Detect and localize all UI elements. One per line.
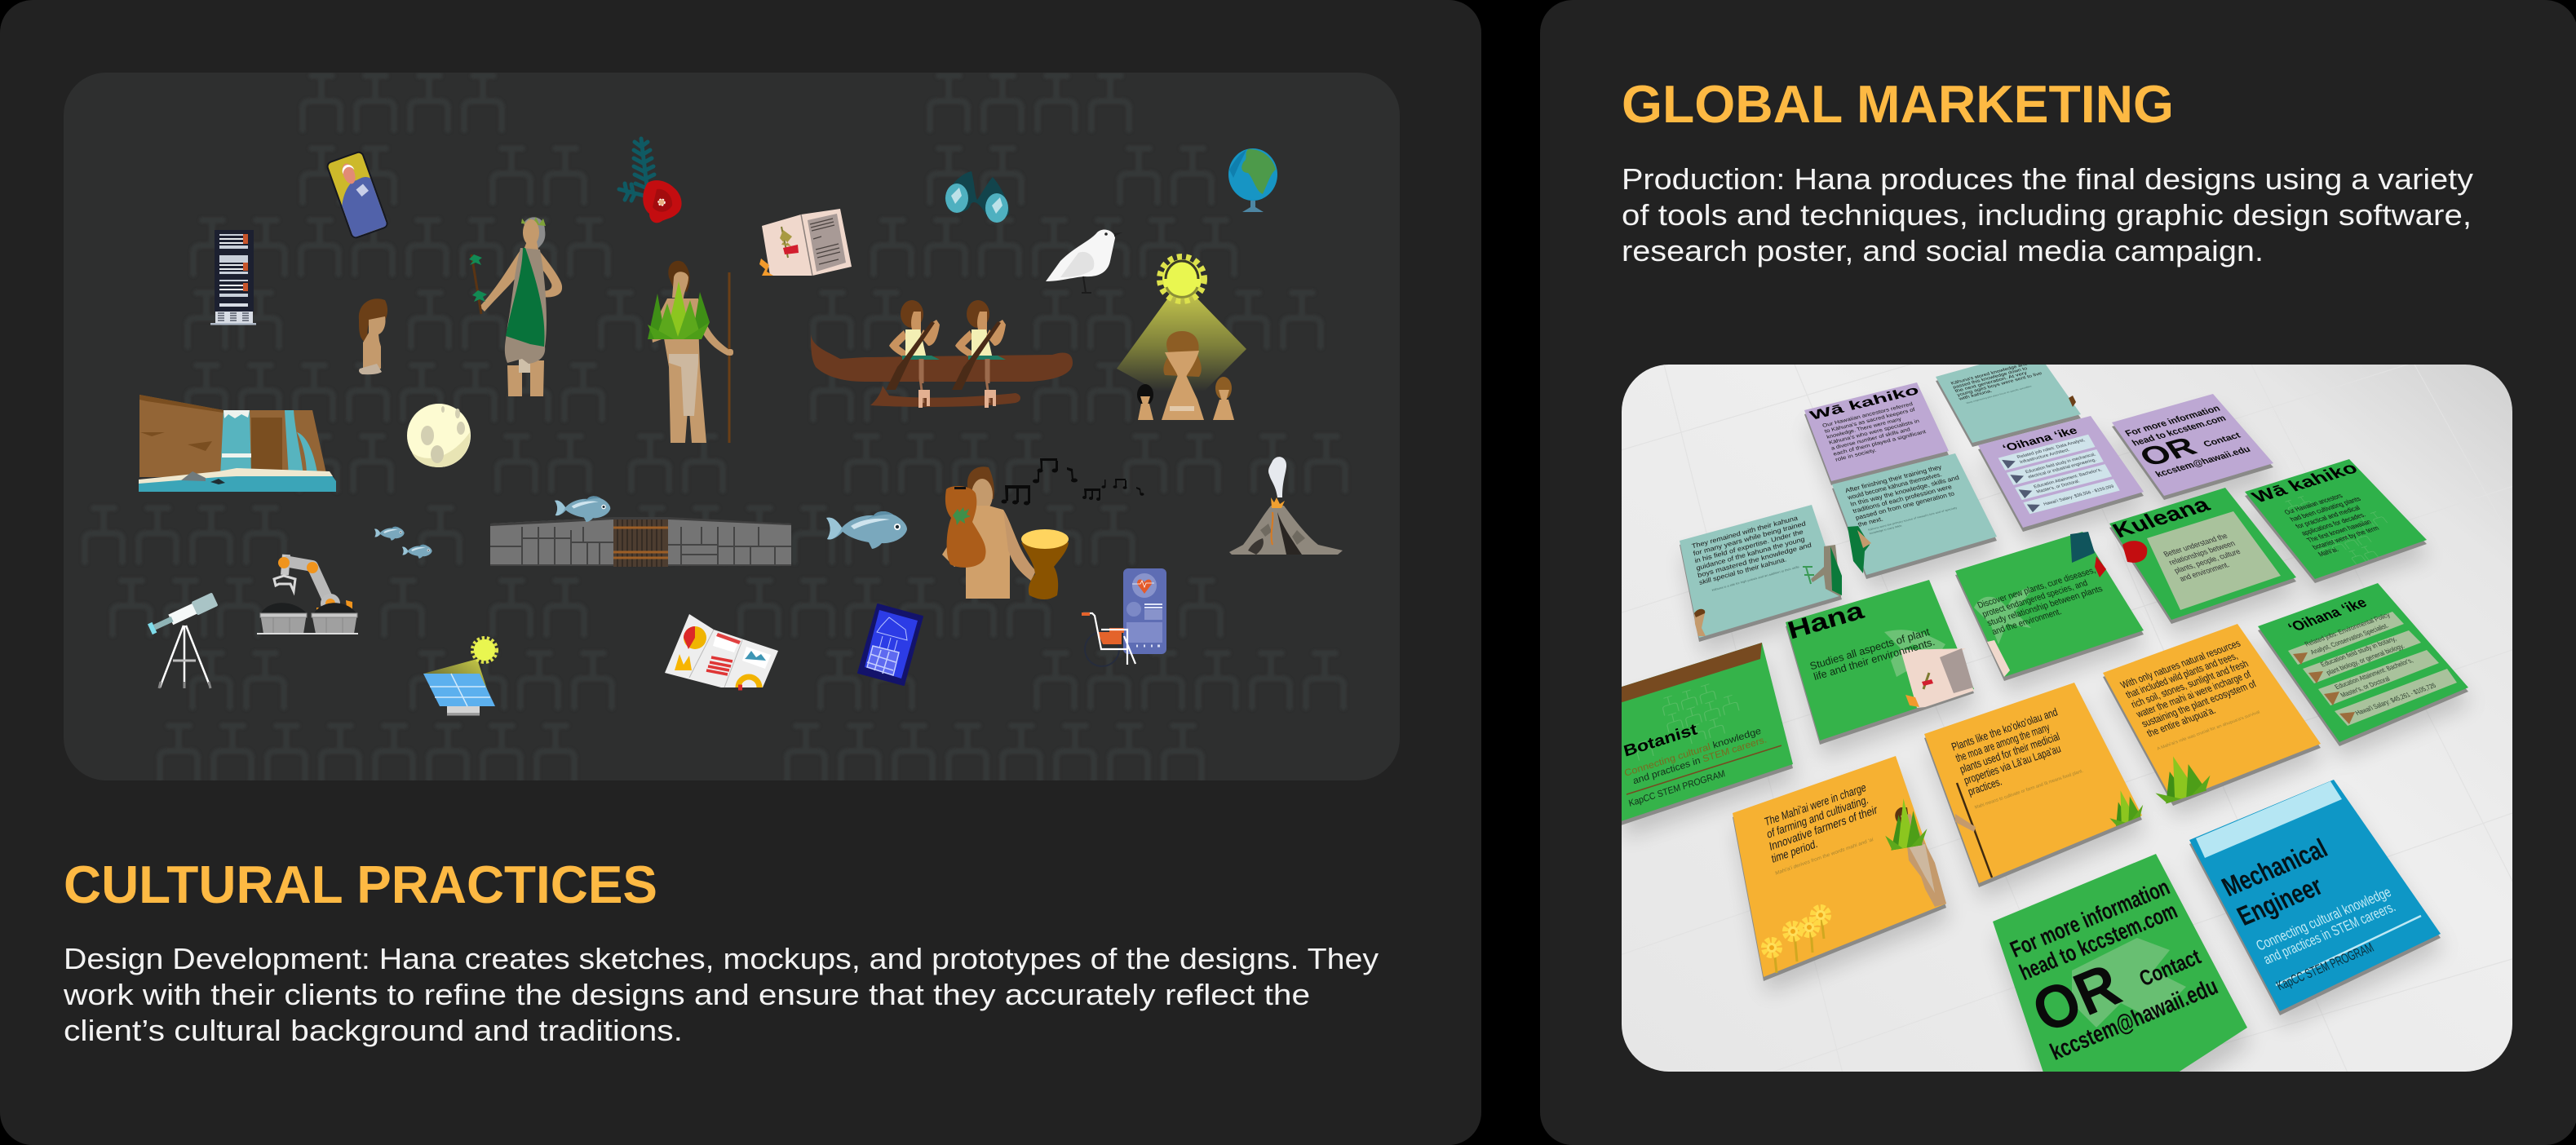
card: teal they remained: guidance of the kahuna the young [1696, 536, 1805, 572]
card: orange plants [1924, 683, 2145, 887]
card: orange Mahi'ai: The Mahi'ai were in charge [1764, 781, 1867, 829]
text block: design development [63, 942, 1379, 1047]
card: green contact: For more information [2007, 874, 2173, 962]
figure: man carrying plant with staff [648, 261, 733, 443]
card: orange Mahi'ai [1733, 756, 1946, 981]
text block: design development: work with their clients to refine the designs and ensure that they accurately reflect the [63, 978, 1310, 1011]
card: purple Wa kahiko [1804, 382, 1949, 485]
card: green Wa kahiko: The first known hawaiian [2305, 518, 2373, 544]
card: orange natural resources: sustaining the plant ecosystem of [2140, 679, 2259, 730]
card: green Hana [1785, 580, 1974, 745]
figure: child [359, 298, 387, 374]
card: teal stored knowledge: young ages boys were sent to live [1956, 371, 2043, 398]
icon: phone with portrait [326, 151, 388, 239]
card: orange plants: properties via Lā'au Lapa'au [1963, 742, 2062, 787]
card: purple Wa kahiko: role in society. [1835, 447, 1877, 462]
card: orange natural resources: the entire ahupua'a. [2144, 705, 2218, 739]
card: green Oihana ike: Master's, or Doctoral [2339, 675, 2392, 699]
card: purple Wa kahiko: a diverse number of skills and [1830, 427, 1911, 451]
card: green contact: head to kccstem.com [2016, 898, 2181, 985]
card: green Oihana ike: ‘Oihana ʻike [2285, 595, 2370, 635]
card: purple Wa kahiko: Our Hawaiian ancestors referred [1821, 401, 1914, 428]
text block: design development: client’s cultural background and traditions. [64, 1014, 683, 1047]
card: orange plants: the moa are among the many [1954, 721, 2052, 764]
icon: telescope on tripod [147, 592, 218, 688]
card: green contact [1993, 854, 2247, 1085]
card: green Oihana ike: Education field study in botany, [2319, 635, 2398, 668]
card: green Wa kahiko [2245, 458, 2427, 583]
card: teal they remained: in his field of expertise. Under the [1694, 528, 1804, 565]
card: teal after finishing: Kāhuna were the primary source of Hawaii's lore and of specialty [1867, 506, 1958, 532]
card: purple Oihana ike [1978, 416, 2144, 532]
card: blue Mechanical Engineer cover: KapCC STEM PROGRAM [2274, 940, 2376, 993]
card: purple Oihana ike: Hawai'i Salary: $39,556 - $159,099 [2043, 484, 2115, 506]
card: teal stored knowledge: passed this knowledge down to [1952, 366, 2029, 390]
card: teal stored knowledge: Many engineering jobs place focus on specific specialties [1966, 385, 2033, 405]
card: teal they remained: skill special to their kahuna. [1698, 556, 1787, 587]
card: green Botanist cover: Botanist [1622, 720, 1699, 760]
card: teal they remained: boys mastered the knowledge and [1697, 542, 1812, 580]
card: purple contact: OR [2134, 431, 2202, 472]
card: teal they remained [1680, 505, 1842, 642]
icons: two small fish [374, 527, 432, 559]
card: teal after finishing: knowledge in many fields [1869, 524, 1902, 535]
card: green Hana: life and their environments. [1812, 636, 1936, 683]
card: green discover: study relationship between plants [1985, 584, 2105, 628]
card: teal stored knowledge: the next generation. At very [1954, 370, 2029, 394]
card: teal stored knowledge: Kāhuna's stored knowledge and [1950, 361, 2029, 386]
card: purple Oihana ike: Infrastructure Architect. [2019, 448, 2071, 465]
card: green discover: protect endangered species, and [1981, 578, 2089, 619]
card: purple contact [2112, 394, 2273, 500]
card: green discover: Discover new plants, cure diseases, [1976, 565, 2097, 610]
card: orange natural resources: rich soil, stones, sunlight and fresh [2129, 658, 2251, 710]
card: green Kuleana: Better understand the [2162, 533, 2229, 559]
card: orange Mahi'ai: Mahi'a'i derives from the words mahi and 'ai [1775, 837, 1874, 877]
card: purple Oihana ike: Related job roles: Data Analyst, [2016, 438, 2087, 460]
card: green Wa kahiko: Wā kahiko [2247, 458, 2361, 506]
card: orange natural resources [2103, 624, 2321, 806]
icon: open plant book [759, 209, 852, 276]
card: green Kuleana: and environment. [2178, 561, 2232, 583]
card: green Wa kahiko: applications for decades. [2299, 511, 2367, 537]
card: green contact: OR [2023, 951, 2131, 1046]
icon: fern and red flower [619, 139, 682, 223]
card: green discover [1955, 532, 2144, 681]
icon: solar panel with sun [423, 638, 497, 716]
card: green Oihana ike [2258, 583, 2468, 746]
card: purple Wa kahiko: Kāhuna's who were specialists in [1828, 418, 1920, 445]
icon: volcano [1229, 457, 1343, 555]
card: purple Wa kahiko: to Kāhuna's as sacred keepers of [1824, 406, 1916, 434]
card: orange natural resources: A Mahi'ai's role was crucial for an ahupua'a's survival [2156, 710, 2261, 752]
icon: wheelchair and health app [1082, 568, 1166, 666]
card: orange plants: Mahi means to cultivate or farm and lā means food plant. [1974, 769, 2084, 811]
card: green discover: and the environment. [1990, 607, 2063, 637]
card: blue Mechanical Engineer cover: and practices in STEM careers. [2261, 899, 2398, 968]
heading: cultural practices: CULTURAL PRACTICES [64, 855, 657, 914]
card: purple contact: Contact [2201, 431, 2242, 449]
card: teal stored knowledge: with kahuna. [1957, 388, 1994, 402]
icon: music notes [1002, 458, 1144, 506]
icon: white bird [1046, 229, 1122, 293]
card: green Botanist cover [1622, 643, 1793, 825]
illustration panel with cultural icons [64, 73, 1400, 780]
icon: fish on wall [555, 496, 610, 522]
icon: moon [407, 404, 471, 467]
card: purple Wa kahiko: knowledge. There were many [1826, 416, 1903, 440]
icon: binoculars [945, 171, 1009, 223]
card: purple Oihana ike: Education field study in mechanical, [2025, 452, 2097, 475]
card: teal after finishing: After finishing their training they [1844, 463, 1943, 494]
card: orange plants: Plants like the ko'oko'olau and [1950, 705, 2059, 754]
card: blue Mechanical Engineer cover [2189, 780, 2441, 1015]
mockup photo: social media cards on a table [1622, 365, 2512, 1072]
card: orange natural resources: With only natures natural resources [2118, 638, 2242, 691]
panel: cultural practices [0, 0, 1481, 1145]
card: orange Mahi'ai: of farming and cultivating. [1766, 794, 1870, 842]
card: purple contact: head to kccstem.com [2130, 413, 2228, 448]
card: green Wa kahiko: botanist went by the term [2311, 524, 2380, 550]
illustration: waterfall [139, 395, 336, 492]
card: green Wa kahiko: Mahi'ai. [2317, 546, 2340, 558]
card: teal after finishing: would become kāhuna themselves. [1846, 471, 1943, 501]
card: green Oihana ike: Education Attainment: Bachelor's, [2334, 656, 2414, 691]
card: teal they remained: for many years while being trained [1693, 520, 1807, 558]
card: purple Oihana ike: electrical or industrial engineering. [2027, 458, 2097, 480]
card: purple contact: kccstem@hawaii.edu [2153, 444, 2252, 479]
card: teal they remained: Kāhuna is a title for high priests and an addition to their skills [1711, 565, 1799, 592]
card: purple contact: For more information [2123, 404, 2222, 438]
card: teal stored knowledge [1936, 359, 2081, 447]
card: orange plants: practices. [1967, 776, 2003, 798]
card: blue Mechanical Engineer cover: Mechanical [2217, 834, 2332, 903]
card: teal after finishing: passed on from one generation to [1854, 490, 1955, 521]
card: purple Oihana ike: Master's, or Doctoral. [2035, 479, 2081, 494]
card: orange natural resources: water the mahi ai were incharge of [2134, 669, 2253, 720]
card: teal after finishing: traditions of each profession were [1852, 483, 1953, 515]
card: green Botanist cover: Connecting cultural knowledge [1623, 725, 1762, 779]
card: green Kuleana: plants, people, culture [2173, 548, 2242, 575]
icon: globe [1228, 148, 1277, 212]
card: green Kuleana [2108, 488, 2296, 624]
card: purple Oihana ike: ‘Oihana ʻike [2000, 425, 2080, 454]
illustration: two paddlers in outrigger canoe [811, 300, 1073, 408]
card: green Oihana ike: Hawai'i Salary: $45,261 - $105,726 [2354, 682, 2438, 717]
card: green Botanist cover: and practices in STEM careers. [1631, 734, 1768, 786]
card: purple Wa kahiko: Wā kahiko [1808, 383, 1921, 423]
card: purple Oihana ike: Education Attainment: Bachelor's, [2033, 467, 2103, 489]
card: green Botanist cover: KapCC STEM PROGRAM [1627, 768, 1726, 808]
icon: tablet with blueprint [858, 604, 923, 685]
text block: production [1622, 162, 2473, 267]
text block: production: of tools and techniques, including graphic design software, [1622, 198, 2472, 232]
icon: large fish [826, 511, 907, 549]
icon: sun with light beam over family [1117, 257, 1246, 420]
card: blue Mechanical Engineer cover: Connecting cultural knowledge [2254, 884, 2394, 954]
card: teal after finishing [1832, 453, 1997, 579]
card: green Kuleana: relationships between [2167, 540, 2237, 567]
card: green Hana: Studies all aspects of plant [1808, 626, 1931, 673]
card: orange plants: plants used for their medicial [1958, 730, 2061, 776]
heading: global marketing: GLOBAL MARKETING [1622, 74, 2174, 134]
text block: production: Production: Hana produces the final designs using a variety [1622, 162, 2473, 196]
card: green Oihana ike: Related jobs: Environmental Policy [2304, 611, 2392, 648]
panel: global marketing [1540, 0, 2576, 1145]
figure: woman with gourd and drum [942, 466, 1069, 599]
card: green Kuleana: Kuleana [2108, 493, 2215, 542]
card: green Wa kahiko: for practical and medical [2294, 504, 2361, 530]
card: orange natural resources: that included wild plants and trees, [2124, 650, 2240, 701]
card: green Wa kahiko: had been cultivating plants [2288, 495, 2363, 523]
card: teal after finishing: the next. [1857, 515, 1884, 528]
card: orange Mahi'ai: Innovative farmers of their [1768, 803, 1879, 854]
card: blue Mechanical Engineer cover: Engineer [2233, 872, 2327, 931]
card: teal they remained: They remained with their kahuna [1691, 515, 1799, 550]
card: green contact: kccstem@hawaii.edu [2046, 973, 2222, 1065]
icon: server rack [210, 230, 256, 325]
text block: production: research poster, and social media campaign. [1622, 234, 2264, 267]
figure: mother and two children [1137, 331, 1234, 420]
card: purple Wa kahiko: each of them played a significant [1832, 429, 1928, 457]
card: teal after finishing: In this way the knowledge, skills and [1849, 474, 1960, 508]
card: green Oihana ike: Analyst, Conservation Specialist. [2309, 622, 2390, 656]
icon: robot arm and coal carts [257, 555, 358, 634]
figure: chief with green sash [469, 217, 562, 396]
illustration: stone fish pond wall with gate [490, 496, 791, 567]
icon: data brochure [665, 614, 778, 687]
text block: design development: Design Development: Hana creates sketches, mockups, and prototypes of the designs. They [64, 942, 1379, 975]
card: green Hana: Hana [1785, 597, 1867, 645]
card: green Wa kahiko: Our Hawaiian ancestors [2282, 492, 2344, 516]
card: green Oihana ike: plant biology, or general biology. [2325, 643, 2406, 676]
card: green contact: Contact [2136, 945, 2205, 991]
card: orange Mahi'ai: time period. [1771, 838, 1819, 866]
